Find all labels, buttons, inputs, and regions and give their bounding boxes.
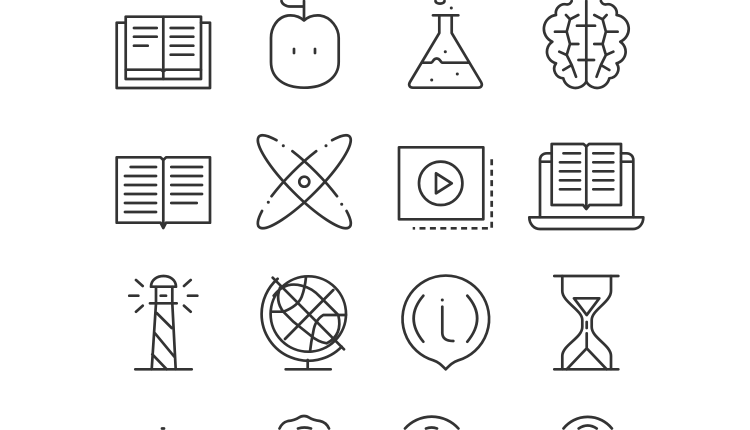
icon: partial bottom mark <box>162 427 164 430</box>
icon: book on laptop <box>529 144 643 229</box>
icon: video player <box>399 147 492 228</box>
icon: atom <box>248 126 360 238</box>
icon: apple <box>271 1 339 88</box>
icon: partial target circle <box>405 417 458 428</box>
icon: hourglass <box>554 276 618 369</box>
icon: partial rosette badge <box>280 416 329 428</box>
icon: closed-back textbook <box>117 17 210 88</box>
icon: open book <box>117 157 210 228</box>
icon: info speech bubble <box>403 276 489 369</box>
icon: lighthouse <box>129 276 197 369</box>
icon: partial concentric circle <box>564 417 612 428</box>
icon: chemistry flask <box>409 1 482 88</box>
icon: desk globe <box>262 276 346 369</box>
icon: brain <box>544 1 629 88</box>
